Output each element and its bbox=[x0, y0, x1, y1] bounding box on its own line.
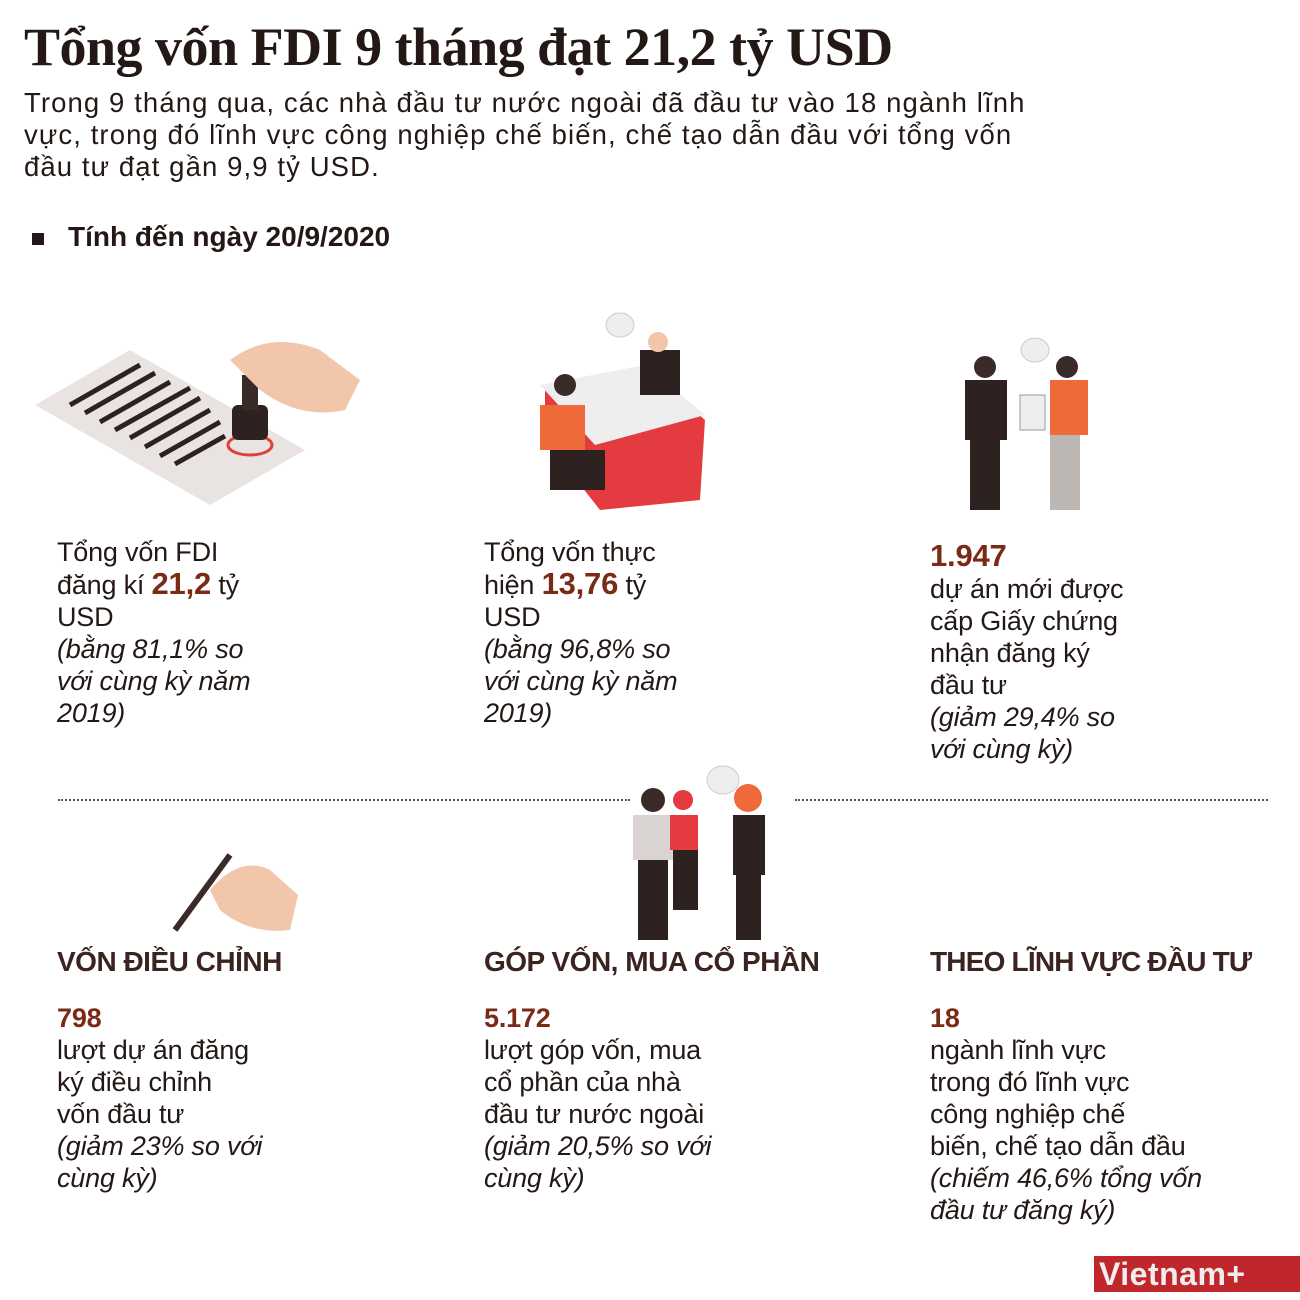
panel: implemented capital: với cùng kỳ năm bbox=[484, 666, 677, 696]
panel: by sector: 18 bbox=[930, 1003, 960, 1033]
panel: adjusted capital: cùng kỳ) bbox=[57, 1163, 157, 1193]
panel: adjusted capital bbox=[57, 946, 282, 1193]
panel: by sector: trong đó lĩnh vực bbox=[930, 1067, 1129, 1097]
panel: registered capital: đăng kí 21,2 tỷ bbox=[57, 566, 239, 601]
panel: by sector: công nghiệp chế bbox=[930, 1099, 1125, 1129]
logo: Vietnam+ bbox=[1099, 1256, 1246, 1292]
panel: by sector: biến, chế tạo dẫn đầu bbox=[930, 1131, 1186, 1161]
panel: registered capital bbox=[56, 537, 250, 728]
title: Tổng vốn FDI 9 tháng đạt 21,2 tỷ USD bbox=[24, 17, 893, 77]
panel: capital contribution: lượt góp vốn, mua bbox=[484, 1035, 701, 1065]
panel: adjusted capital: VỐN ĐIỀU CHỈNH bbox=[57, 946, 282, 977]
panel: implemented capital: Tổng vốn thực bbox=[484, 537, 656, 567]
icon: document and stamp bbox=[36, 342, 360, 505]
panel: by sector: (chiếm 46,6% tổng vốn bbox=[930, 1163, 1202, 1193]
panel: by sector: ngành lĩnh vực bbox=[930, 1035, 1106, 1065]
panel: registered capital: USD bbox=[57, 602, 113, 632]
panel: adjusted capital: vốn đầu tư bbox=[57, 1099, 184, 1129]
intro text: đầu tư đạt gần 9,9 tỷ USD. bbox=[24, 151, 380, 182]
intro text bbox=[24, 87, 1026, 182]
panel: adjusted capital: ký điều chỉnh bbox=[57, 1067, 212, 1097]
panel: adjusted capital: lượt dự án đăng bbox=[57, 1035, 249, 1065]
panel: adjusted capital: (giảm 23% so với bbox=[57, 1131, 262, 1161]
panel: registered capital: Tổng vốn FDI bbox=[57, 537, 218, 567]
panel: new projects: 1.947 bbox=[930, 538, 1007, 573]
icon: meeting at desk bbox=[540, 312, 705, 510]
panel: new projects bbox=[930, 538, 1123, 764]
panel: new projects: nhận đăng ký bbox=[930, 638, 1090, 668]
intro text: vực, trong đó lĩnh vực công nghiệp chế biến, chế tạo dẫn đầu với tổng vốn bbox=[24, 119, 1012, 150]
panel: adjusted capital: 798 bbox=[57, 1003, 101, 1033]
panel: implemented capital: (bằng 96,8% so bbox=[484, 634, 670, 664]
panel: capital contribution: cùng kỳ) bbox=[484, 1163, 584, 1193]
panel: capital contribution: đầu tư nước ngoài bbox=[484, 1099, 704, 1129]
icon: two people with document bbox=[965, 338, 1088, 510]
icon: group of people bbox=[633, 766, 765, 940]
panel: new projects: cấp Giấy chứng bbox=[930, 606, 1118, 636]
date bullet: Tính đến ngày 20/9/2020 bbox=[68, 221, 390, 252]
panel: registered capital: 2019) bbox=[57, 698, 125, 728]
icon: pen in hand bbox=[172, 853, 298, 932]
panel: capital contribution: GÓP VỐN, MUA CỔ PHẦN bbox=[484, 946, 819, 977]
panel: by sector: THEO LĨNH VỰC ĐẦU TƯ bbox=[930, 946, 1251, 977]
panel: by sector: đầu tư đăng ký) bbox=[930, 1195, 1115, 1225]
panel: registered capital: (bằng 81,1% so bbox=[57, 634, 243, 664]
panel: new projects: (giảm 29,4% so bbox=[930, 702, 1115, 732]
panel: implemented capital: hiện 13,76 tỷ bbox=[484, 566, 646, 601]
panel: registered capital: với cùng kỳ năm bbox=[57, 666, 250, 696]
panel: capital contribution: cổ phần của nhà bbox=[484, 1067, 681, 1097]
panel: new projects: với cùng kỳ) bbox=[930, 734, 1073, 764]
panel: implemented capital: 2019) bbox=[484, 698, 552, 728]
panel: capital contribution bbox=[484, 946, 819, 1193]
panel: by sector bbox=[930, 946, 1252, 1225]
panel: capital contribution: (giảm 20,5% so với bbox=[484, 1131, 711, 1161]
panel: implemented capital: USD bbox=[484, 602, 540, 632]
panel: new projects: đầu tư bbox=[930, 670, 1007, 700]
panel: capital contribution: 5.172 bbox=[484, 1003, 551, 1033]
panel: new projects: dự án mới được bbox=[930, 574, 1123, 604]
panel: implemented capital bbox=[484, 537, 677, 728]
intro text: Trong 9 tháng qua, các nhà đầu tư nước ngoài đã đầu tư vào 18 ngành lĩnh bbox=[24, 87, 1026, 118]
